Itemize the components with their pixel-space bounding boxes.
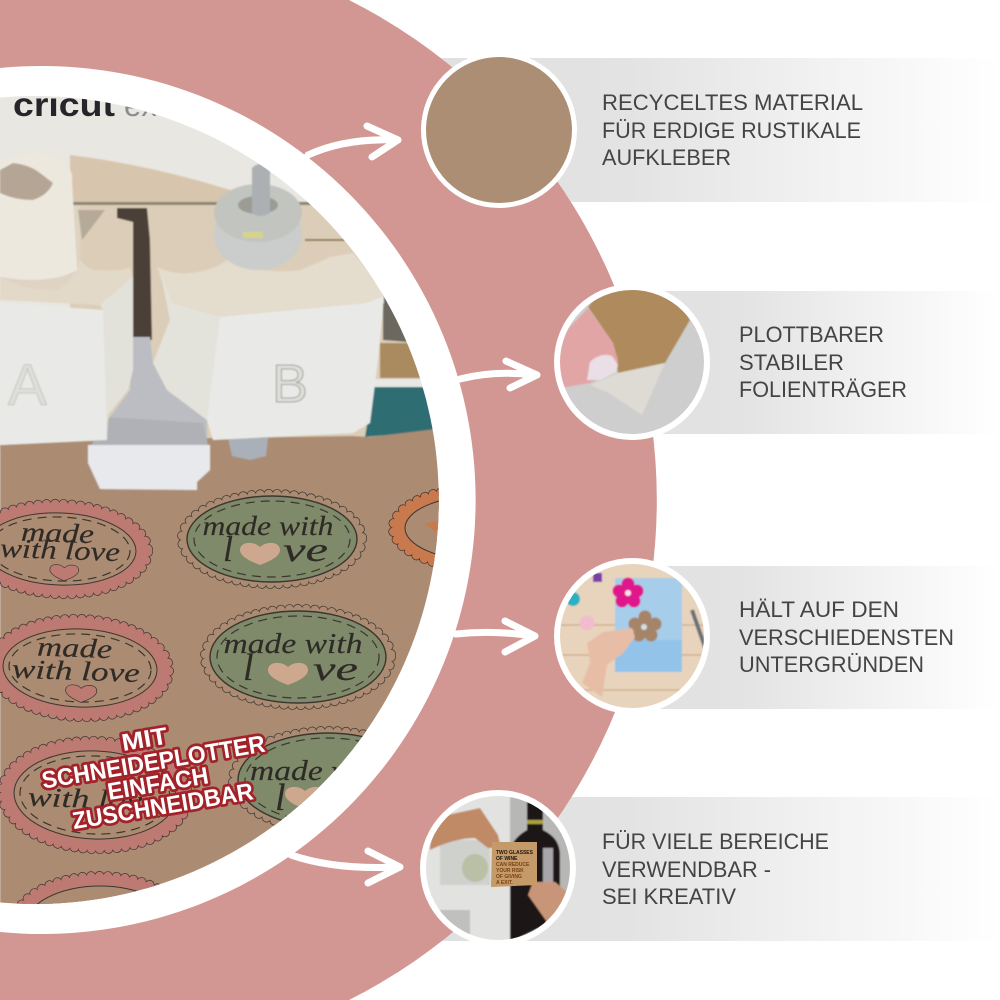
text: many uses: FÜR VIELE BEREICHE xyxy=(602,829,829,854)
letter A: A xyxy=(8,353,47,418)
sticker: green row 3 xyxy=(228,726,366,826)
teal and purple shapes xyxy=(566,592,580,606)
sticker: pink row 2 xyxy=(0,616,171,720)
text: recycled material: AUFKLEBER xyxy=(602,145,731,170)
sticker: green row 3: made with xyxy=(250,756,389,787)
small flower xyxy=(580,616,594,630)
circle 3: craft flowers on blue paper xyxy=(554,558,710,715)
text: adheres to many surfaces xyxy=(739,597,954,677)
cricut logo: cricut xyxy=(13,86,115,123)
text: plottable backing: FOLIENTRÄGER xyxy=(739,377,907,402)
sticker: pink row 4 xyxy=(17,871,160,904)
circle 4: wine bottle with sticker xyxy=(420,790,580,950)
sticker on bottle: A EXIT. xyxy=(496,880,513,886)
sticker on bottle: OF GIVING xyxy=(496,874,522,880)
arrow 4 xyxy=(291,851,400,883)
sticker: green row 2: l xyxy=(243,647,254,689)
pink flower xyxy=(612,578,644,608)
sticker: green row 3: l xyxy=(275,777,286,819)
sticker: green row 1 xyxy=(182,494,362,584)
text: recycled material xyxy=(602,90,863,170)
text: plottable backing: STABILER xyxy=(739,350,844,375)
arrow 2 xyxy=(460,361,537,388)
machine details xyxy=(0,154,439,904)
cylinder hole xyxy=(0,163,53,200)
logo faded letters: ex xyxy=(124,88,157,123)
callout: cutting plotter label xyxy=(36,707,275,839)
circle 2: peeling film backing xyxy=(554,284,710,440)
sticker: green row 2 xyxy=(205,609,391,705)
white ring around main photo xyxy=(0,66,476,934)
knob top xyxy=(214,184,302,242)
sticker on bottle: TWO GLASSES xyxy=(496,850,534,856)
grey channel xyxy=(110,336,208,440)
feature bar 1 xyxy=(430,58,1000,202)
text: many uses: SEI KREATIV xyxy=(602,884,736,909)
sticker on bottle: OF WINE xyxy=(496,856,518,862)
large pink circle xyxy=(0,0,657,1000)
letter B: B xyxy=(272,354,308,414)
text: many uses: VERWENDBAR - xyxy=(602,857,771,882)
block A side xyxy=(100,277,133,440)
feature bar 3 xyxy=(600,566,1000,709)
peg xyxy=(228,438,268,460)
text: plottable backing: PLOTTBARER xyxy=(739,322,884,347)
sticker: green row 1: l xyxy=(223,529,233,569)
block B cream band xyxy=(157,253,384,317)
arrow 1 xyxy=(308,126,398,157)
text: many uses xyxy=(602,829,829,909)
text: adheres to many surfaces: HÄLT AUF DEN xyxy=(739,597,899,622)
left cylinder xyxy=(0,170,78,280)
sticker on bottle: CAN REDUCE xyxy=(496,862,530,868)
text: adheres to many surfaces: VERSCHIEDENSTEN xyxy=(739,625,954,650)
block A band xyxy=(15,262,133,305)
callout: cutting plotter label: EINFACH xyxy=(106,762,211,806)
sticker: pink row 3 xyxy=(0,738,190,852)
circle 1: kraft material swatch xyxy=(421,52,577,208)
sticker: orange xyxy=(388,488,439,567)
sticker: green row 1: made with xyxy=(202,511,334,541)
sticker: pink row 3: with love xyxy=(27,782,158,816)
sticker: pink row 2: made xyxy=(37,632,113,664)
sticker: green row 2: made with xyxy=(224,629,362,660)
sticker: pink row 1: made xyxy=(21,517,95,549)
arrow 3 xyxy=(456,621,535,652)
callout: cutting plotter label: SCHNEIDEPLOTTER xyxy=(40,731,267,795)
text: recycled material: RECYCELTES MATERIAL xyxy=(602,90,863,115)
callout: cutting plotter label: MIT xyxy=(120,723,170,757)
sticker: pink row 1 xyxy=(0,501,150,597)
rear machine parts xyxy=(382,295,407,343)
sticker: green row 2: ve xyxy=(313,651,358,688)
sticker on bottle: YOUR RISK xyxy=(496,868,524,874)
block B side xyxy=(153,270,220,420)
sticker: green row 1: ve xyxy=(283,532,328,569)
white foot xyxy=(88,445,210,490)
text: plottable backing xyxy=(739,322,907,402)
kraft paper sheet xyxy=(0,428,439,904)
machine top plate xyxy=(0,96,308,450)
brown flower xyxy=(628,610,662,642)
foot upper xyxy=(93,418,208,445)
dark gap between tool heads xyxy=(117,208,152,340)
block B front xyxy=(207,296,384,440)
sticker: pink row 2: with love xyxy=(11,654,140,688)
sticker on bottle xyxy=(491,842,537,887)
sticker: pink row 1: with love xyxy=(0,533,120,567)
hand xyxy=(582,628,635,697)
pin xyxy=(252,164,270,216)
tweezers xyxy=(692,610,706,650)
knob base xyxy=(214,224,302,270)
block A front xyxy=(0,303,107,445)
main photo: cutting plotter on kraft sticker sheet xyxy=(0,96,439,904)
feature bar 4 xyxy=(430,797,1000,941)
feature bar 2 xyxy=(600,291,1000,434)
text: adheres to many surfaces: UNTERGRÜNDEN xyxy=(739,652,924,677)
text: recycled material: FÜR ERDIGE RUSTIKALE xyxy=(602,118,861,143)
callout: cutting plotter label: ZUSCHNEIDBAR xyxy=(70,778,255,835)
